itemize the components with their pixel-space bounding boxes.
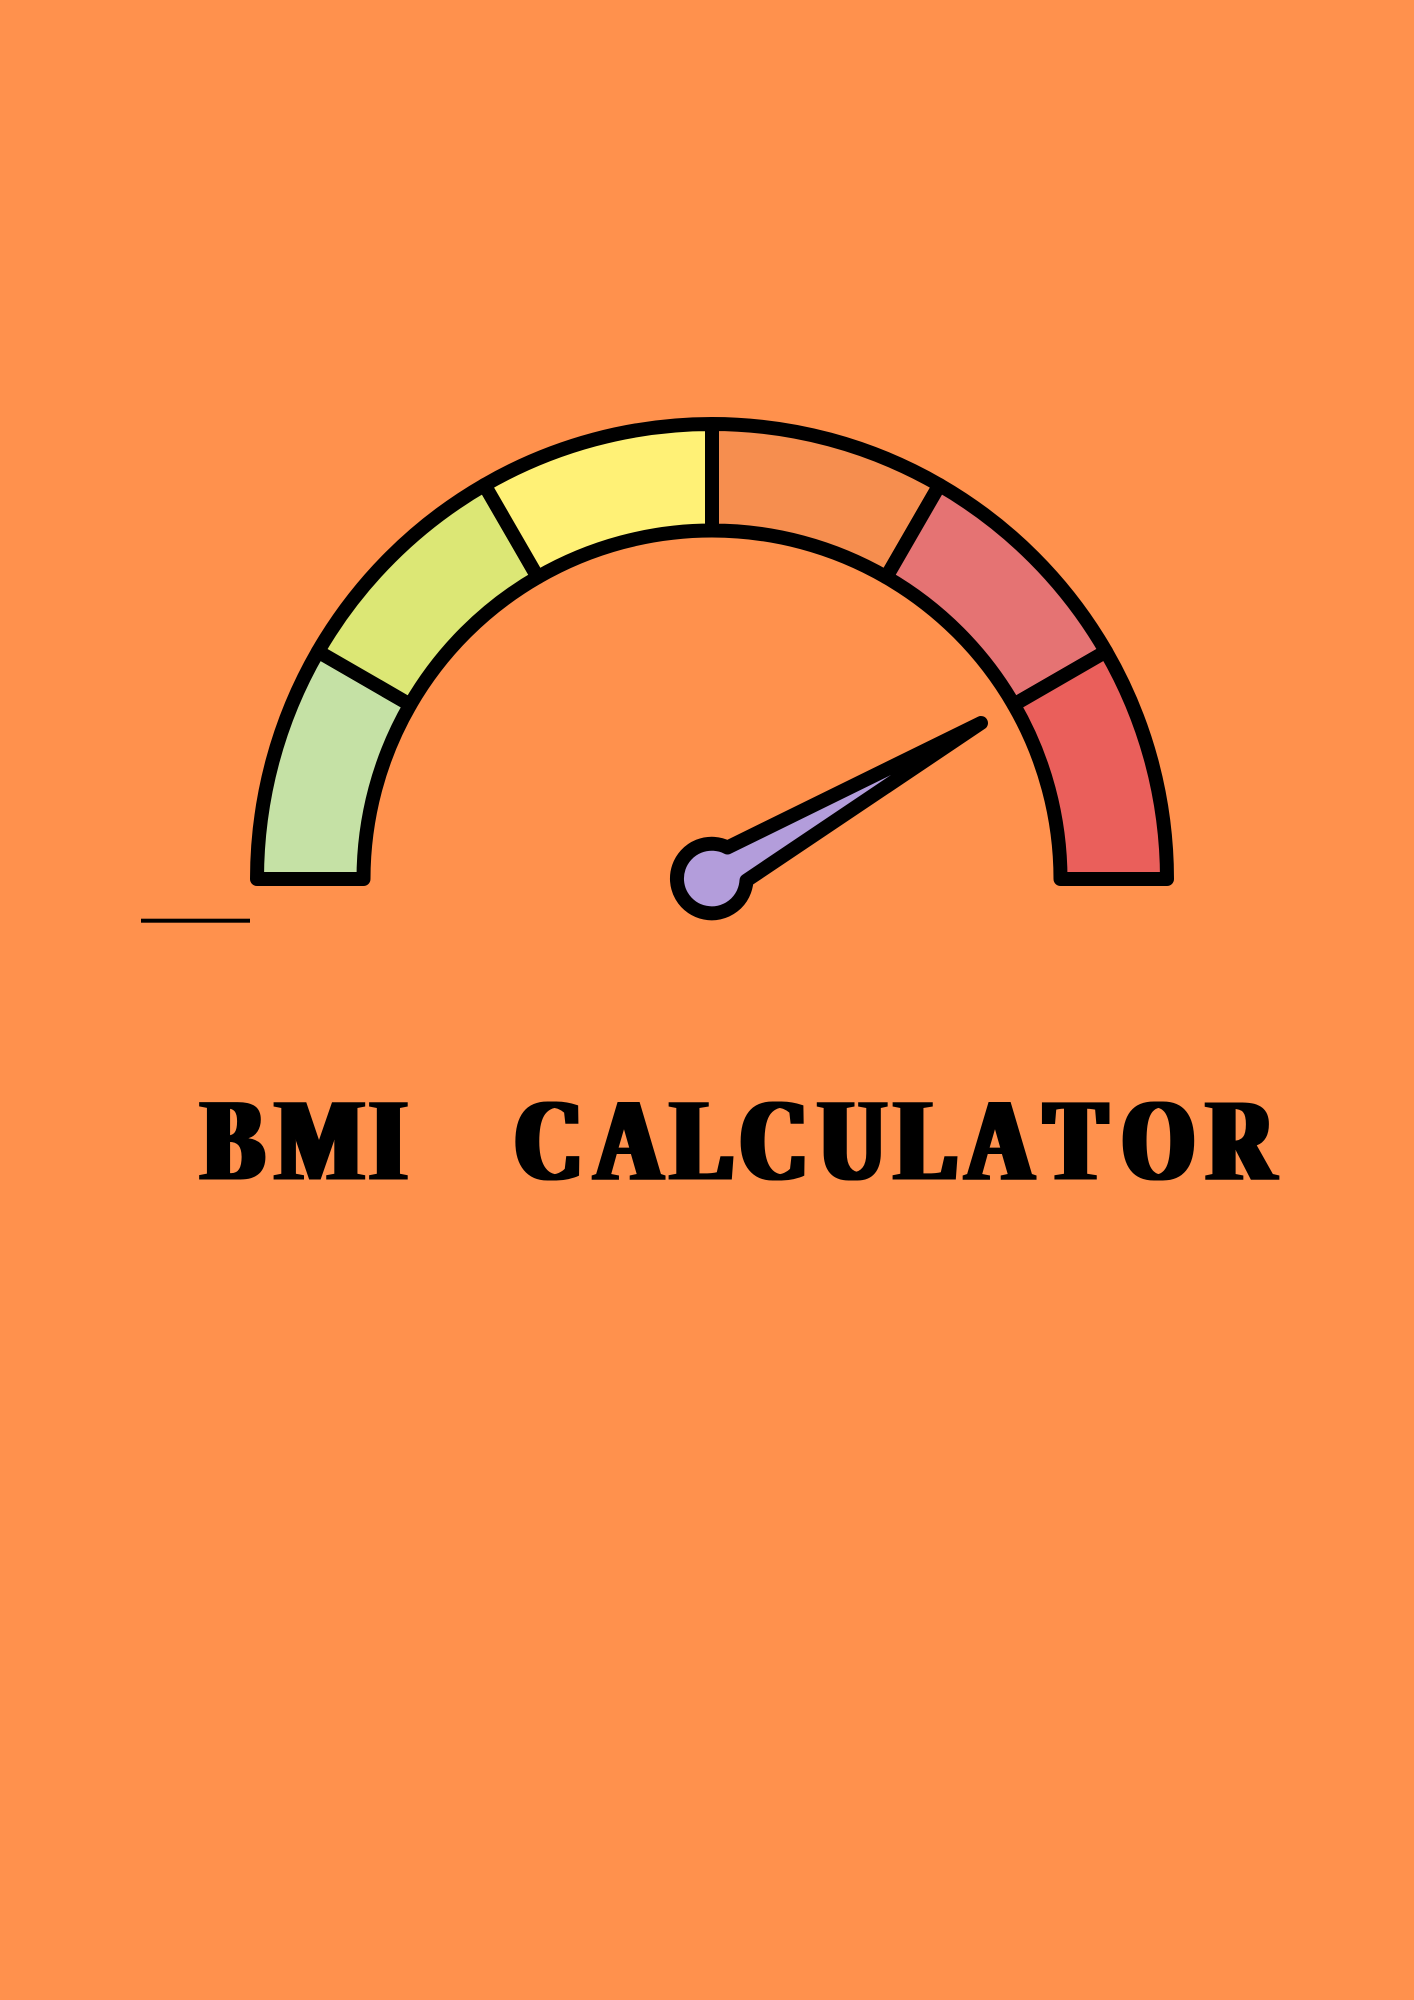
title: BMI CALCULATOR	[202, 1075, 1275, 1205]
gauge segment: green	[257, 652, 410, 879]
gauge segment: orange	[712, 424, 940, 577]
gauge segment: red	[1014, 652, 1167, 879]
short line	[141, 919, 250, 923]
gauge segment: lime	[318, 485, 538, 705]
gauge segment: yellow	[484, 424, 712, 577]
gauge needle	[677, 723, 981, 913]
gauge segment: pink	[886, 485, 1106, 705]
gauge	[257, 424, 1167, 879]
